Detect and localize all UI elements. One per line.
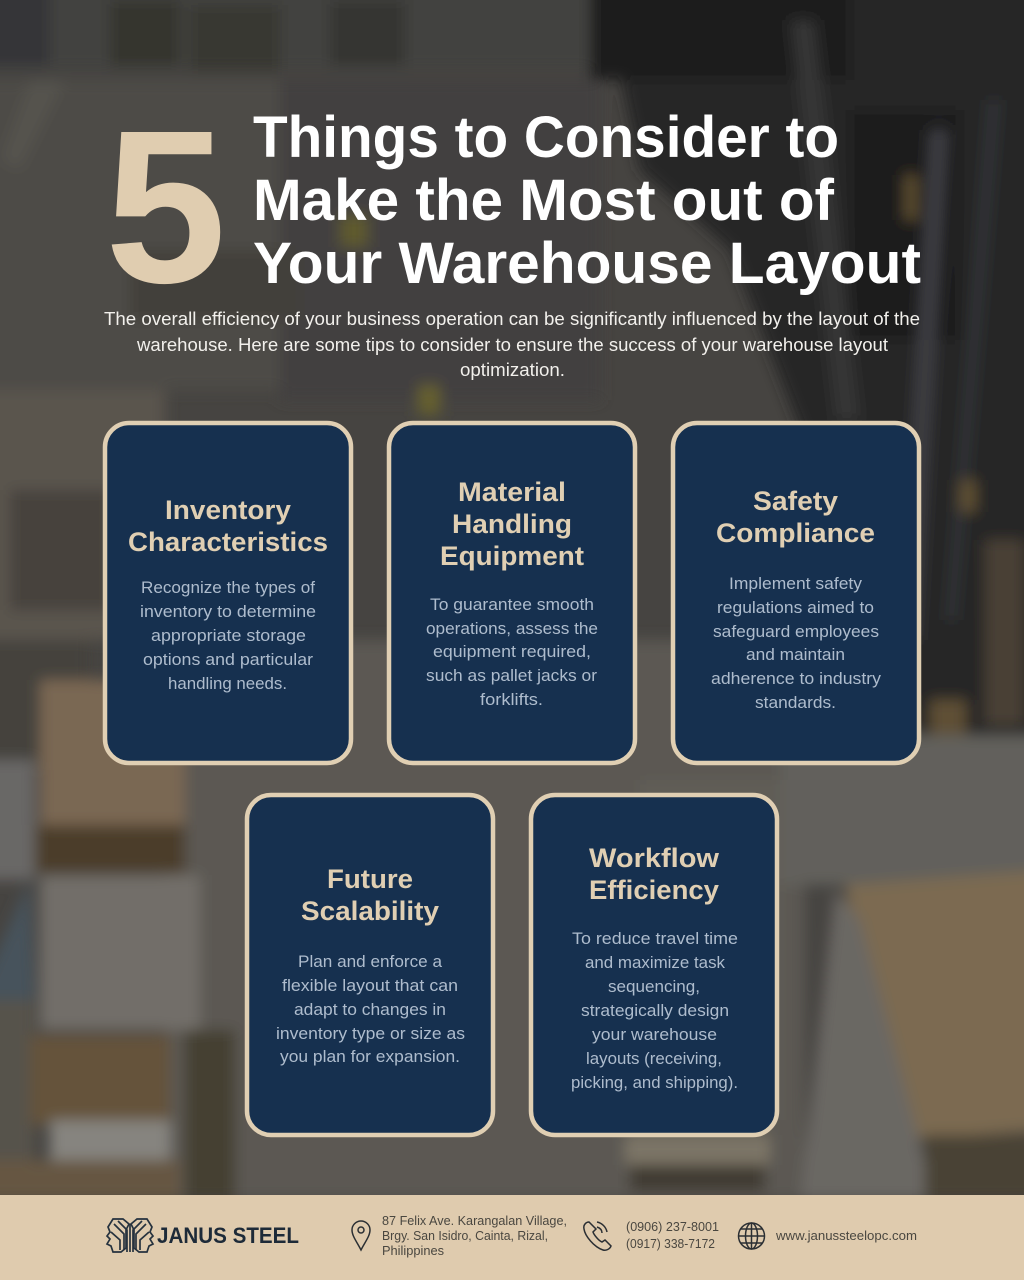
heading: Material Handling Equipment: Handling: [452, 509, 572, 539]
big numeral 5: 5: [105, 86, 226, 329]
panel: Safety Compliance: [673, 423, 919, 763]
heading: Workflow Efficiency: Efficiency: [589, 875, 719, 905]
text: Inventory Characteristics body: handling needs.: [168, 674, 287, 693]
text: Material Handling Equipment body: equipment required,: [433, 642, 591, 661]
text: Workflow Efficiency body: strategically design: [581, 1001, 729, 1020]
text: Safety Compliance body: [711, 574, 882, 712]
intro paragraph: [104, 309, 920, 380]
text: Future Scalability body: adapt to changes in: [294, 1000, 446, 1019]
panel: Inventory Characteristics: [105, 423, 351, 763]
text: Safety Compliance body: adherence to industry: [711, 669, 882, 688]
footer band: [0, 1195, 1024, 1280]
heading: Workflow Efficiency: Workflow: [589, 843, 720, 873]
heading: Inventory Characteristics: [128, 495, 328, 557]
text: Future Scalability body: Plan and enforce a: [298, 952, 443, 971]
panel: Material Handling Equipment: [389, 423, 635, 763]
heading: Workflow Efficiency: [589, 843, 720, 905]
heading: Future Scalability: Future: [327, 864, 413, 894]
heading: Inventory Characteristics: Characteristics: [128, 527, 328, 557]
logo wordmark: JANUS STEEL: [157, 1223, 299, 1248]
text: Material Handling Equipment body: [426, 595, 598, 709]
icon: location pin: [352, 1221, 370, 1250]
phone numbers: (0906) 237-8001: [626, 1219, 719, 1234]
text: Inventory Characteristics body: Recognize the types of: [141, 578, 315, 597]
intro paragraph: The overall efficiency of your business operation can be significantly influenced by the layout of the: [104, 309, 920, 329]
heading: Safety Compliance: Safety: [753, 486, 838, 516]
address: Brgy. San Isidro, Cainta, Rizal,: [382, 1228, 548, 1243]
text: Material Handling Equipment body: To guarantee smooth: [430, 595, 594, 614]
heading: Material Handling Equipment: Equipment: [440, 541, 584, 571]
text: Material Handling Equipment body: operations, assess the: [426, 619, 598, 638]
phone numbers: (0917) 338-7172: [626, 1236, 715, 1251]
heading: Material Handling Equipment: Material: [458, 477, 566, 507]
address: [382, 1213, 567, 1258]
text: Inventory Characteristics body: inventory to determine: [140, 602, 316, 621]
text: Material Handling Equipment body: forklifts.: [480, 690, 543, 709]
heading: Safety Compliance: Compliance: [716, 518, 875, 548]
text: Workflow Efficiency body: and maximize task: [585, 953, 725, 972]
title: Your Warehouse Layout: [253, 231, 921, 296]
text: Workflow Efficiency body: To reduce travel time: [572, 929, 738, 948]
text: Safety Compliance body: and maintain: [746, 645, 845, 664]
text: Inventory Characteristics body: options and particular: [143, 650, 313, 669]
heading: Inventory Characteristics: Inventory: [165, 495, 291, 525]
text: Future Scalability body: flexible layout that can: [282, 976, 458, 995]
intro paragraph: warehouse. Here are some tips to consider to ensure the success of your warehouse layout: [136, 335, 888, 355]
panel: Future Scalability: [247, 795, 493, 1135]
text: Inventory Characteristics body: appropriate storage: [151, 626, 306, 645]
title: Things to Consider to: [253, 105, 839, 170]
text: Future Scalability body: [276, 952, 465, 1066]
text: Workflow Efficiency body: [571, 929, 738, 1092]
text: Safety Compliance body: safeguard employees: [713, 622, 879, 641]
heading: Material Handling Equipment: [440, 477, 584, 571]
phone numbers: [626, 1219, 719, 1251]
address: 87 Felix Ave. Karangalan Village,: [382, 1213, 567, 1228]
text: Material Handling Equipment body: such as pallet jacks or: [426, 666, 597, 685]
text: Workflow Efficiency body: picking, and shipping).: [571, 1073, 738, 1092]
heading: Safety Compliance: [716, 486, 875, 548]
panel: Workflow Efficiency: [531, 795, 777, 1135]
intro paragraph: optimization.: [460, 360, 565, 380]
address: Philippines: [382, 1243, 444, 1258]
title: Make the Most out of: [253, 168, 835, 233]
text: Inventory Characteristics body: [140, 578, 316, 693]
text: Workflow Efficiency body: sequencing,: [608, 977, 700, 996]
website: www.janussteelopc.com: [775, 1228, 917, 1243]
icon: phone: [584, 1222, 611, 1250]
text: Future Scalability body: inventory type or size as: [276, 1024, 465, 1043]
heading: Future Scalability: [301, 864, 439, 926]
text: Safety Compliance body: Implement safety: [729, 574, 863, 593]
icon: Janus Steel logo: [107, 1219, 153, 1252]
icon: globe: [738, 1223, 764, 1249]
text: Safety Compliance body: standards.: [755, 693, 836, 712]
text: Workflow Efficiency body: layouts (receiving,: [586, 1049, 722, 1068]
text: Workflow Efficiency body: your warehouse: [592, 1025, 717, 1044]
heading: Future Scalability: Scalability: [301, 896, 439, 926]
text: Safety Compliance body: regulations aimed to: [717, 598, 874, 617]
title: [253, 105, 921, 296]
text: Future Scalability body: you plan for expansion.: [280, 1047, 460, 1066]
